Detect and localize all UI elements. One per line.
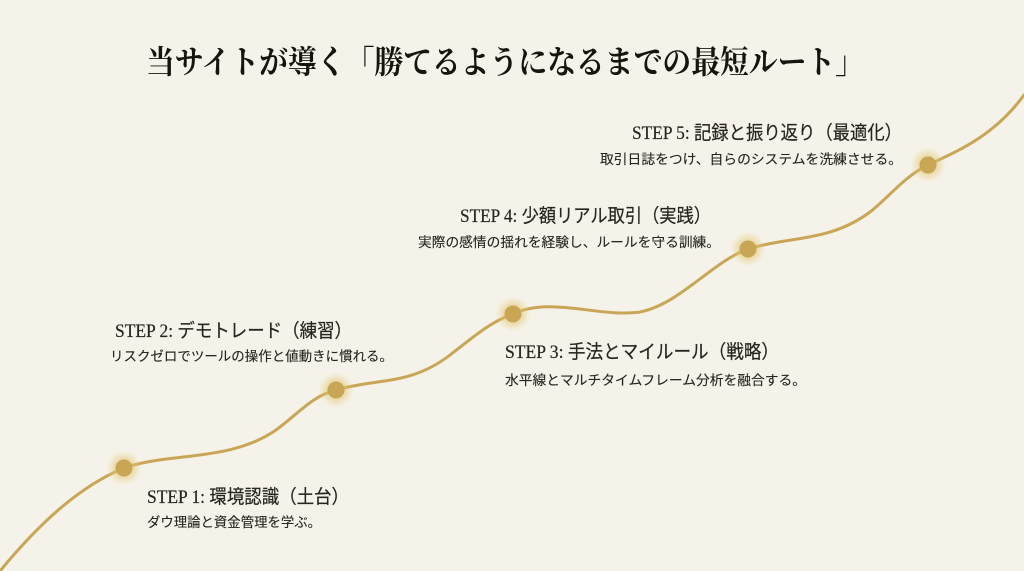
node: step 1 [106,450,142,486]
step 5 text: STEP 5: 記録と振り返り（最適化） [632,122,902,144]
step 4 text [418,205,720,250]
step 2 text [110,320,393,364]
step 1 text: STEP 1: 環境認識（土台） [147,486,349,508]
step 1 text [147,486,349,530]
node: step 3 [495,296,531,332]
step 5 text: 取引日誌をつけ、自らのシステムを洗練させる。 [600,152,902,167]
title: 当サイトが導く「勝てるようになるまでの最短ルート」 [146,44,864,80]
step 2 text: リスクゼロでツールの操作と値動きに慣れる。 [110,349,393,364]
node: step 4 [730,231,766,267]
node: step 5 [910,147,946,183]
step 3 text: 水平線とマルチタイムフレーム分析を融合する。 [505,373,806,388]
step 2 text: STEP 2: デモトレード（練習） [115,320,352,342]
step 1 text: ダウ理論と資金管理を学ぶ。 [147,514,321,530]
node: step 2 [318,372,354,408]
step 3 text [505,341,806,388]
step 5 text [600,122,902,167]
step 3 text: STEP 3: 手法とマイルール（戦略） [505,341,779,363]
step 4 text: 実際の感情の揺れを経験し、ルールを守る訓練。 [418,234,720,250]
step 4 text: STEP 4: 少額リアル取引（実践） [460,205,711,227]
